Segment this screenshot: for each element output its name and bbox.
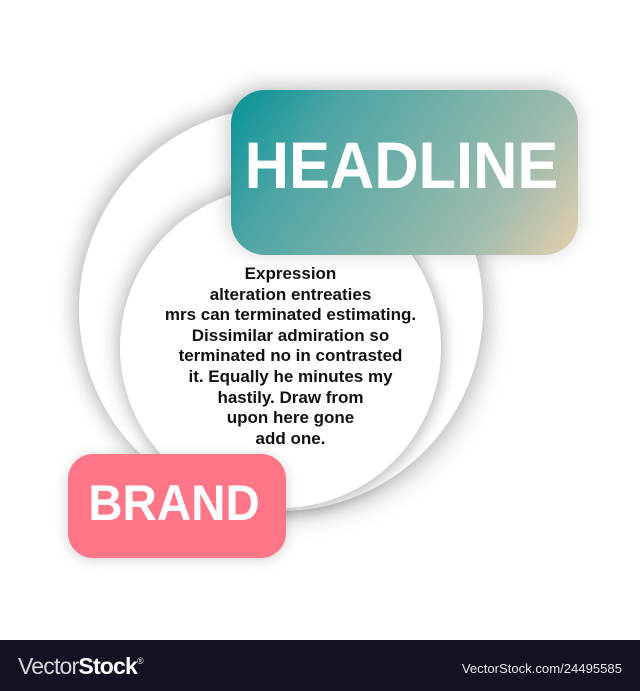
- body text: upon here gone: [227, 408, 354, 427]
- body text: add one.: [256, 429, 325, 448]
- inner circle: [120, 187, 441, 508]
- brand panel: [68, 454, 286, 558]
- body text: Dissimilar admiration so: [192, 326, 389, 345]
- headline panel: [231, 90, 578, 255]
- body text: mrs can terminated estimating.: [165, 305, 416, 324]
- outer circle: [79, 107, 483, 511]
- body text: Expression: [245, 264, 336, 283]
- brand text: BRAND: [88, 475, 259, 531]
- body text: alteration entreaties: [210, 285, 371, 304]
- body text: hastily. Draw from: [217, 388, 364, 407]
- headline text: HEADLINE: [245, 128, 558, 202]
- body text: terminated no in contrasted: [179, 346, 402, 365]
- footer image url: VectorStock.com/24495585: [462, 661, 622, 676]
- footer bar: [0, 640, 640, 691]
- body text: it. Equally he minutes my: [188, 367, 393, 386]
- footer logo: VectorStock®: [18, 653, 143, 679]
- body text: [165, 264, 416, 448]
